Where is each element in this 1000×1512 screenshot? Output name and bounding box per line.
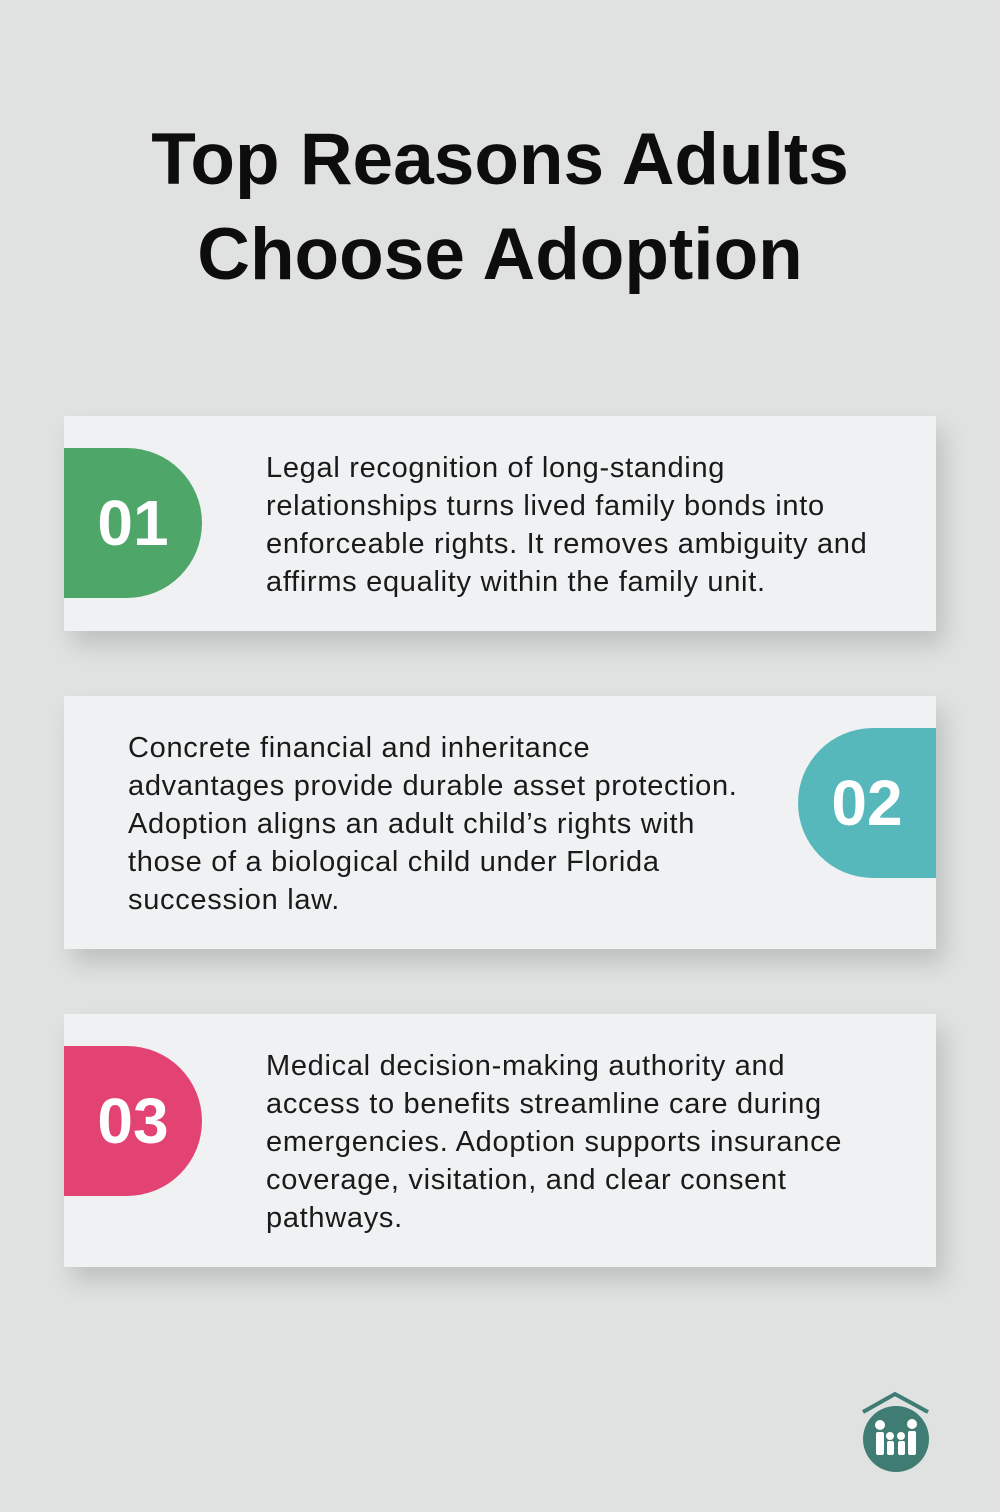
badge 01: 01 [97,487,169,559]
text 01: enforceable rights. It removes ambiguity and [266,528,867,560]
text 02: succession law. [128,884,340,916]
text 01: relationships turns lived family bonds into [266,490,825,522]
text 01: Legal recognition of long-standing [266,452,725,484]
text 02 [128,732,738,916]
badge 03: 03 [97,1085,169,1157]
badge 03 [64,1046,202,1196]
text 02: those of a biological child under Florida [128,846,660,878]
badge 02 [798,728,936,878]
text 03: coverage, visitation, and clear consent [266,1164,787,1196]
text 01: affirms equality within the family unit. [266,566,766,598]
panel: reason 01 [64,416,936,631]
panel: reason 03 [64,1014,936,1267]
text 01 [266,452,867,598]
text 03: Medical decision-making authority and [266,1050,785,1082]
title: Top Reasons Adults [151,119,849,200]
text 02: Concrete financial and inheritance [128,732,590,764]
text 02: Adoption aligns an adult child’s rights with [128,808,695,840]
text 03: access to benefits streamline care during [266,1088,822,1120]
panel: reason 02 [64,696,936,949]
badge 02: 02 [831,767,903,839]
text 03 [266,1050,842,1234]
text 03: emergencies. Adoption supports insurance [266,1126,842,1158]
text 03: pathways. [266,1202,403,1234]
title [151,119,849,295]
title: Choose Adoption [197,214,803,295]
icon: logo [862,1392,929,1472]
text 02: advantages provide durable asset protection. [128,770,738,802]
badge 01 [64,448,202,598]
